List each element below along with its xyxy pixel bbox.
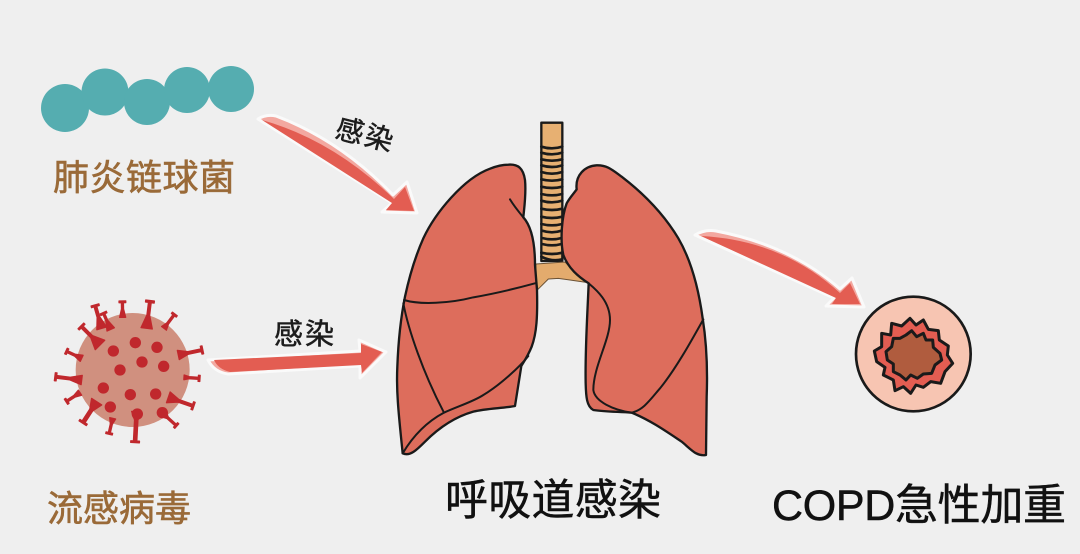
label: influenza virus: 流感病毒 (47, 488, 191, 529)
arrow: lungs to COPD (695, 230, 864, 307)
label: infection, upper: 感染 (333, 113, 396, 157)
label: infection, lower: 感染 (274, 318, 334, 351)
left lung fissures (403, 199, 535, 453)
arrow: virus to lungs (208, 340, 386, 378)
label: respiratory infection: 呼吸道感染 (445, 477, 661, 525)
bronchi (535, 262, 588, 289)
icon: streptococcus pneumoniae chain (41, 66, 254, 132)
icon: airway cross-section (856, 297, 971, 411)
trachea (541, 123, 562, 261)
arrow: bacteria to lungs (258, 115, 417, 213)
lungs illustration (397, 123, 707, 455)
right lung (viewer's right) (562, 165, 707, 455)
left lung (viewer's left) (397, 165, 537, 454)
label: COPD acute exacerbation: COPD急性加重 (772, 482, 1066, 530)
right lung fissures (589, 283, 703, 413)
label: streptococcus pneumoniae: 肺炎链球菌 (53, 157, 235, 198)
icon: influenza virus (54, 300, 204, 443)
